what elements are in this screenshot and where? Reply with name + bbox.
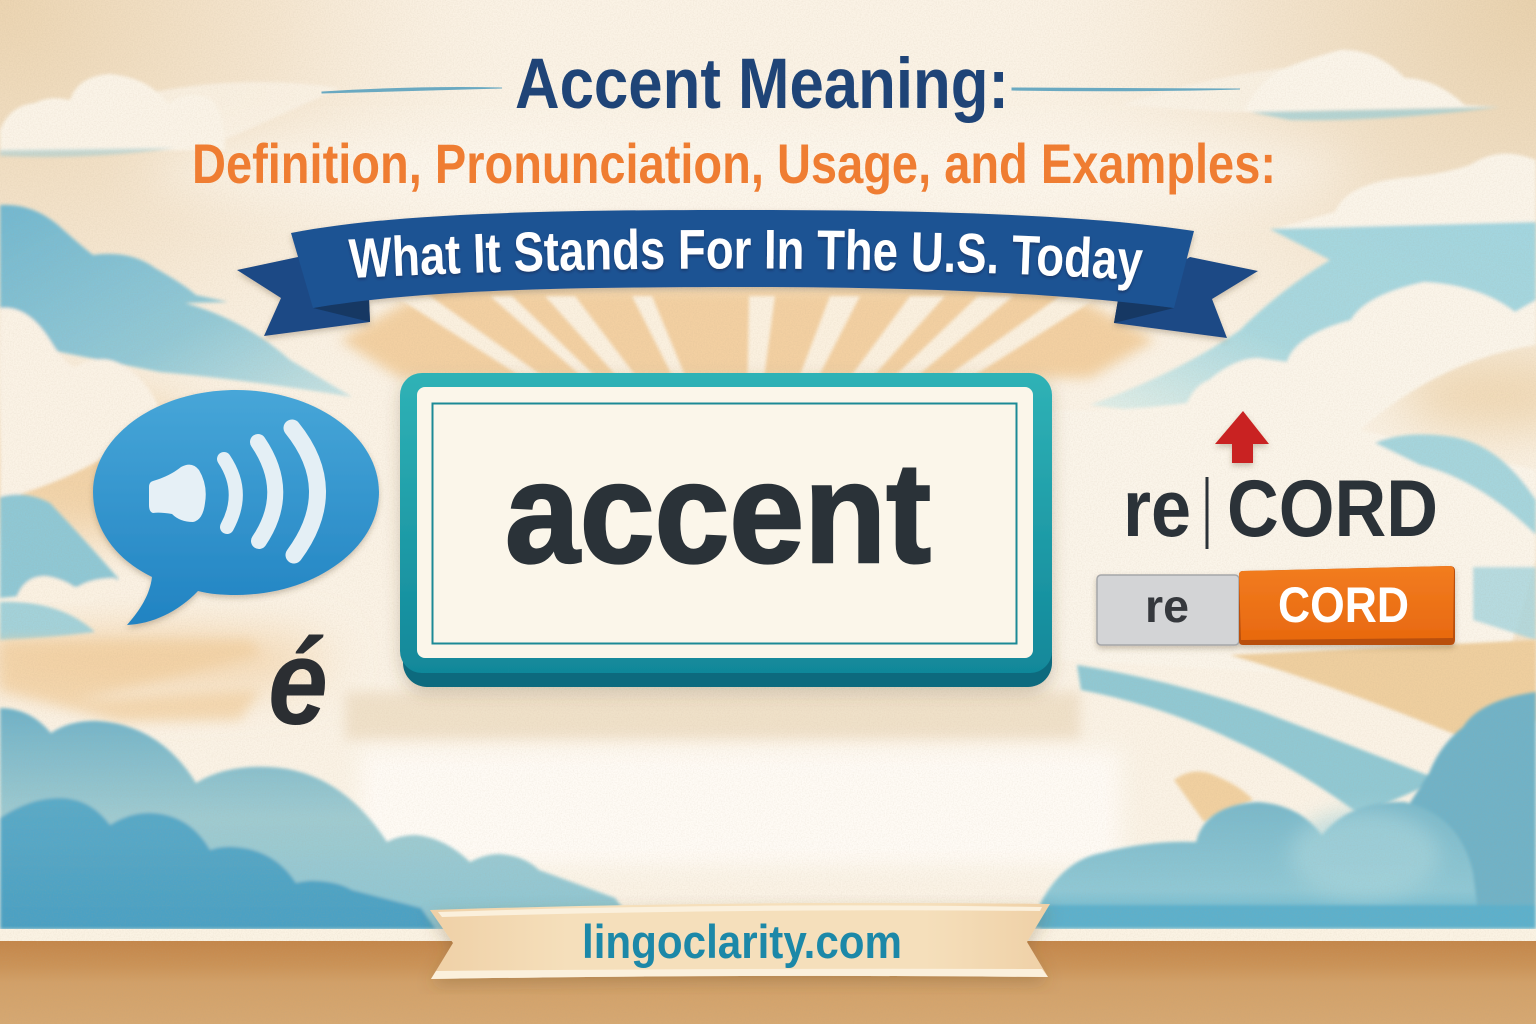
word: accent: accent bbox=[505, 434, 931, 593]
stress arrow bbox=[1215, 411, 1269, 463]
card inner border bbox=[432, 404, 1016, 644]
peach spot lower right bbox=[1174, 772, 1253, 822]
teal stripe right bbox=[1077, 665, 1440, 815]
speech bubble icon bbox=[93, 390, 379, 625]
ribbon text: What It Stands For In The U.S. Today bbox=[348, 228, 1144, 294]
subtitle: Definition, Pronunciation, Usage, and Examples: bbox=[192, 132, 1276, 195]
bottom right clouds bbox=[1030, 692, 1536, 929]
peach streaks bbox=[0, 640, 1536, 745]
ribbon banner bbox=[237, 210, 1258, 344]
bottom left clouds bbox=[0, 708, 640, 930]
button: re: re bbox=[1145, 580, 1189, 632]
sun rays bbox=[340, 288, 1155, 520]
right clouds bbox=[1050, 154, 1536, 682]
icon: sound waves bbox=[224, 428, 318, 555]
button: CORD bbox=[1239, 566, 1455, 645]
clouds top bbox=[0, 50, 1500, 157]
title: Accent Meaning: bbox=[515, 45, 1009, 124]
stress word bbox=[1123, 464, 1438, 554]
stress word: re bbox=[1123, 464, 1191, 554]
button: CORD: CORD bbox=[1278, 577, 1409, 633]
main word card bbox=[400, 373, 1052, 687]
icon: speaker bbox=[149, 465, 206, 522]
bottom centre haze bbox=[360, 750, 1120, 865]
footer text: lingoclarity.com bbox=[582, 915, 902, 968]
syllable buttons bbox=[1097, 566, 1455, 645]
accented letter e: é bbox=[268, 614, 328, 750]
title decorative lines bbox=[322, 88, 1240, 93]
ground band bbox=[0, 929, 1536, 1024]
footer banner bbox=[430, 903, 1050, 979]
button: re bbox=[1097, 575, 1239, 645]
stress word: CORD bbox=[1227, 464, 1438, 554]
left teal cloud bbox=[0, 205, 352, 640]
